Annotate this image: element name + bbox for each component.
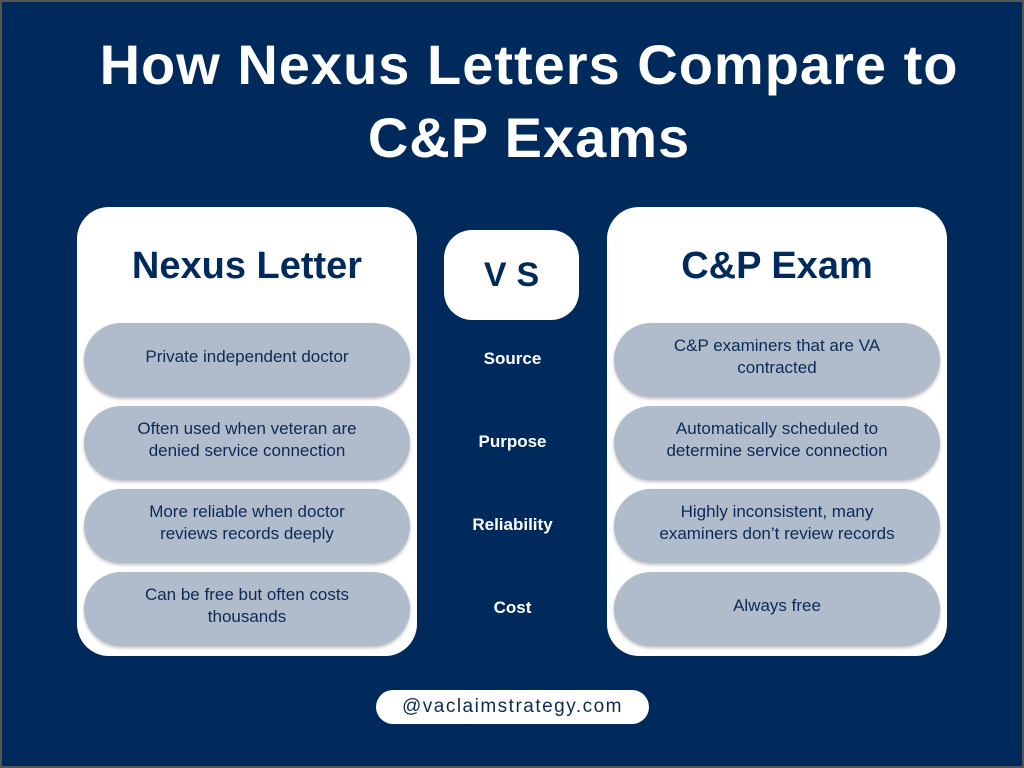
footer handle — [376, 690, 649, 724]
heading: c&p exam: C&P Exam — [681, 245, 873, 287]
pill: reliability — [84, 489, 410, 563]
vs badge: VS — [484, 256, 549, 294]
footer handle: @vaclaimstrategy.com — [402, 696, 623, 717]
pill: source — [84, 323, 410, 397]
label: reliability: Reliability — [472, 515, 553, 534]
label: source: Source — [484, 349, 541, 368]
panel: c&p exam — [607, 207, 947, 656]
title: C&P Exams — [368, 106, 690, 169]
pill: source: C&P examiners that are VA contracted — [674, 336, 880, 377]
pill: purpose — [614, 406, 940, 480]
pill: cost: Can be free but often costs thousands — [145, 585, 349, 626]
pill: purpose — [84, 406, 410, 480]
title: How Nexus Letters Compare to — [100, 33, 958, 96]
pill: cost — [84, 572, 410, 646]
title — [100, 33, 958, 169]
panel: nexus letter — [77, 207, 417, 656]
pill: reliability: Highly inconsistent, many examiners don’t review records — [659, 502, 895, 543]
pill: cost: Always free — [733, 596, 821, 615]
pill: purpose: Often used when veteran are denied service connection — [137, 419, 357, 460]
pill: source — [614, 323, 940, 397]
pill: reliability — [614, 489, 940, 563]
pill: cost — [614, 572, 940, 646]
pill: reliability: More reliable when doctor reviews records deeply — [149, 502, 345, 543]
vs badge — [444, 230, 579, 320]
heading: nexus letter: Nexus Letter — [132, 245, 362, 287]
pill: source: Private independent doctor — [145, 347, 349, 366]
label: cost: Cost — [494, 598, 531, 617]
label: purpose: Purpose — [478, 432, 547, 451]
pill: purpose: Automatically scheduled to determine service connection — [666, 419, 888, 460]
